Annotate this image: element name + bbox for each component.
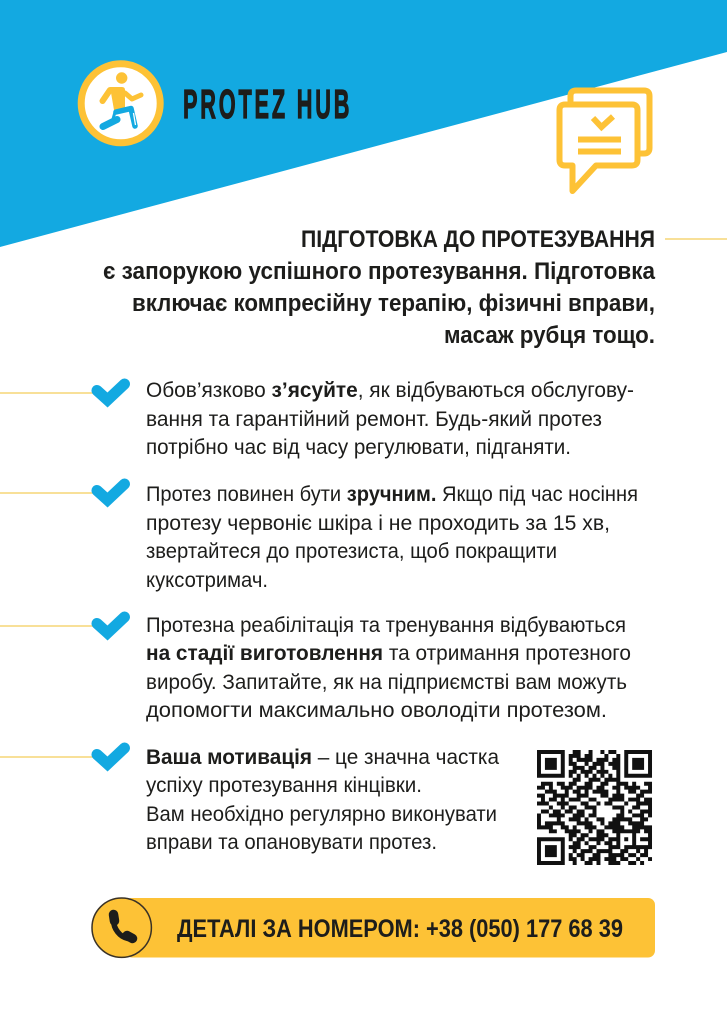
item 1: service and warranty (0, 379, 634, 459)
QR code (537, 750, 652, 865)
item 4 text: успіху протезування кінцівки. (146, 774, 422, 797)
icon: phone (92, 898, 151, 957)
heading title: ПІДГОТОВКА ДО ПРОТЕЗУВАННЯ (301, 226, 655, 253)
item 2 text: протезу червоніє шкіра і не проходить за 15 хв, (146, 512, 610, 535)
item 1 text: Обов’язково з’ясуйте, як відбуваються обслугову- (146, 379, 634, 402)
item 1 text: вання та гарантійний ремонт. Будь-який протез (146, 408, 602, 431)
item 2 text: куксотримач. (146, 569, 268, 592)
item 1 text: потрібно час від часу регулювати, підганяти. (146, 436, 571, 459)
item 2: comfort (0, 483, 638, 592)
item 3 text: допомогти максимально оволодіти протезом. (146, 699, 607, 722)
heading text: включає компресійну терапію, фізичні вправи, (132, 290, 655, 317)
heading text: є запорукою успішного протезування. Підготовка (103, 258, 656, 285)
icon: running figure with prosthetic leg (81, 64, 160, 143)
item 4 text: Вам необхідно регулярно виконувати (146, 803, 497, 826)
phone bar (92, 898, 655, 958)
item 3 text (146, 614, 631, 722)
heading text (103, 258, 656, 349)
brand name: PROTEZ HUB (183, 81, 349, 127)
item 2 text: звертайтеся до протезиста, щоб покращити (146, 540, 557, 563)
phone number text: ДЕТАЛІ ЗА НОМЕРОМ: +38 (050) 177 68 39 (177, 915, 623, 943)
item 4 text: Ваша мотивація – це значна частка (146, 746, 499, 769)
item 3 text: на стадії виготовлення та отримання протезного (146, 642, 631, 665)
heading block (103, 226, 727, 349)
phone bar background (125, 898, 655, 958)
icon: check with line (0, 748, 124, 764)
logo: Protez Hub (81, 64, 349, 143)
heading accent line (665, 238, 727, 240)
icon: check with line (0, 484, 124, 500)
item 2 text (146, 483, 638, 592)
item 4 text (146, 746, 499, 854)
item 3 text: виробу. Запитайте, як на підприємстві вам можуть (146, 671, 627, 694)
item 3: rehabilitation (0, 614, 631, 722)
item 3 text: Протезна реабілітація та тренування відбуваються (146, 614, 626, 637)
icon: check with line (0, 384, 124, 400)
icon: check with line (0, 617, 124, 633)
heading text: масаж рубця тощо. (444, 322, 655, 349)
item 4 text: вправи та опановувати протез. (146, 831, 437, 854)
icon: chat bubbles with checkmark (560, 90, 650, 191)
item 1 text (146, 379, 634, 459)
blue diagonal header background (0, 0, 727, 247)
item 2 text: Протез повинен бути зручним. Якщо під час носіння (146, 483, 638, 506)
item 4: motivation (0, 746, 499, 854)
